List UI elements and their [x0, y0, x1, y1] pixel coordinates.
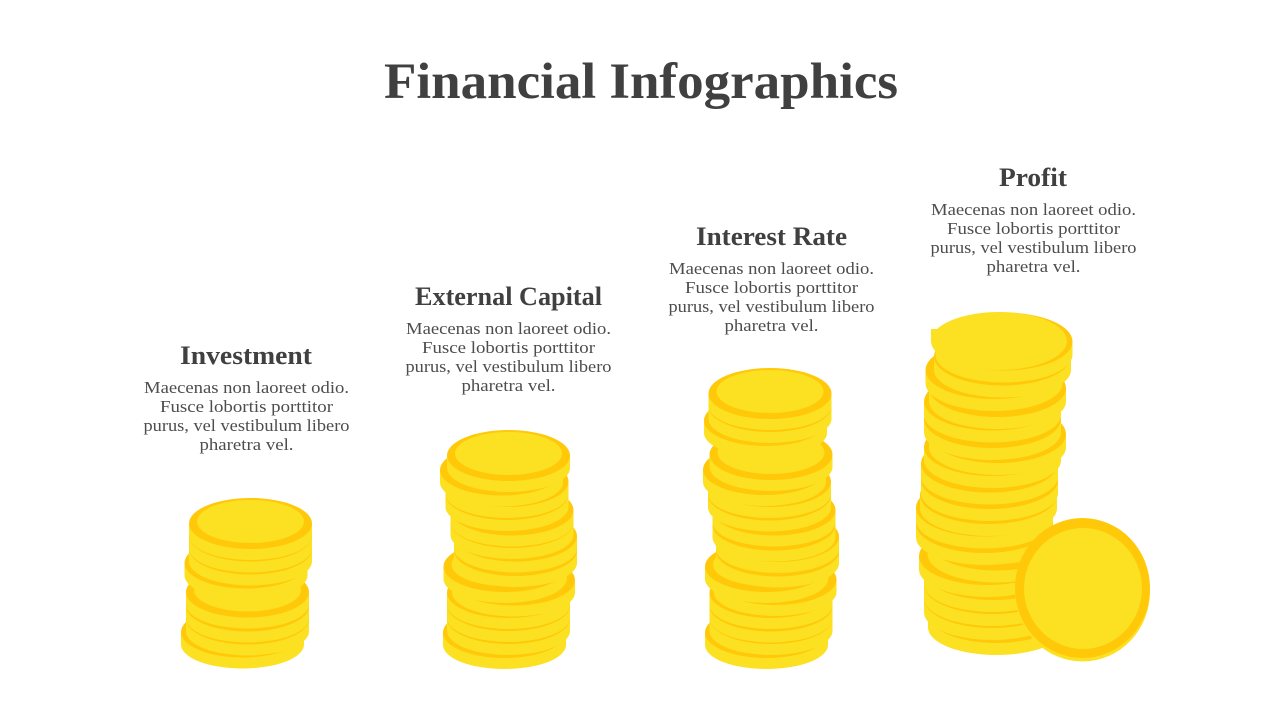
text block: Investment description [144, 378, 350, 454]
heading: Investment: Investment [180, 341, 312, 370]
text block: Investment description: pharetra vel. [200, 435, 294, 454]
icon: large front coin [1015, 518, 1150, 662]
text block: Interest Rate description: pharetra vel. [724, 316, 818, 335]
text block: External Capital description: pharetra vel. [462, 376, 556, 395]
text block: Interest Rate description: Maecenas non laoreet odio. [669, 259, 874, 278]
text block: Interest Rate description: Fusce lobortis porttitor [685, 278, 858, 297]
column: Profit [916, 163, 1150, 662]
text block: Interest Rate description: purus, vel vestibulum libero [668, 297, 874, 316]
text block: External Capital description: Maecenas non laoreet odio. [406, 319, 611, 338]
text block: Profit description: purus, vel vestibulum libero [930, 238, 1136, 257]
heading: Profit: Profit [999, 163, 1067, 192]
text block: Investment description: purus, vel vestibulum libero [144, 416, 350, 435]
text block: Profit description: Maecenas non laoreet odio. [931, 200, 1136, 219]
text block: Investment description: Fusce lobortis porttitor [160, 397, 333, 416]
icon: coin stack, Interest Rate [703, 368, 839, 669]
column: Investment [144, 341, 350, 668]
text block: External Capital description: purus, vel vestibulum libero [406, 357, 612, 376]
icon: coin stack, External Capital [440, 430, 577, 669]
title: Financial Infographics [384, 54, 898, 110]
text block: Investment description: Maecenas non laoreet odio. [144, 378, 349, 397]
text block: Interest Rate description [668, 259, 874, 335]
icon: coin stack, Profit [916, 312, 1072, 655]
text block: External Capital description [406, 319, 612, 395]
text block: External Capital description: Fusce lobortis porttitor [422, 338, 595, 357]
column: External Capital [406, 282, 612, 669]
text block: Profit description: pharetra vel. [986, 257, 1080, 276]
icon: coin stack, Investment [181, 498, 312, 668]
text block: Profit description: Fusce lobortis porttitor [947, 219, 1120, 238]
heading: Interest Rate: Interest Rate [696, 222, 847, 251]
column: Interest Rate [668, 222, 874, 669]
text block: Profit description [930, 200, 1136, 276]
heading: External Capital: External Capital [415, 282, 602, 311]
